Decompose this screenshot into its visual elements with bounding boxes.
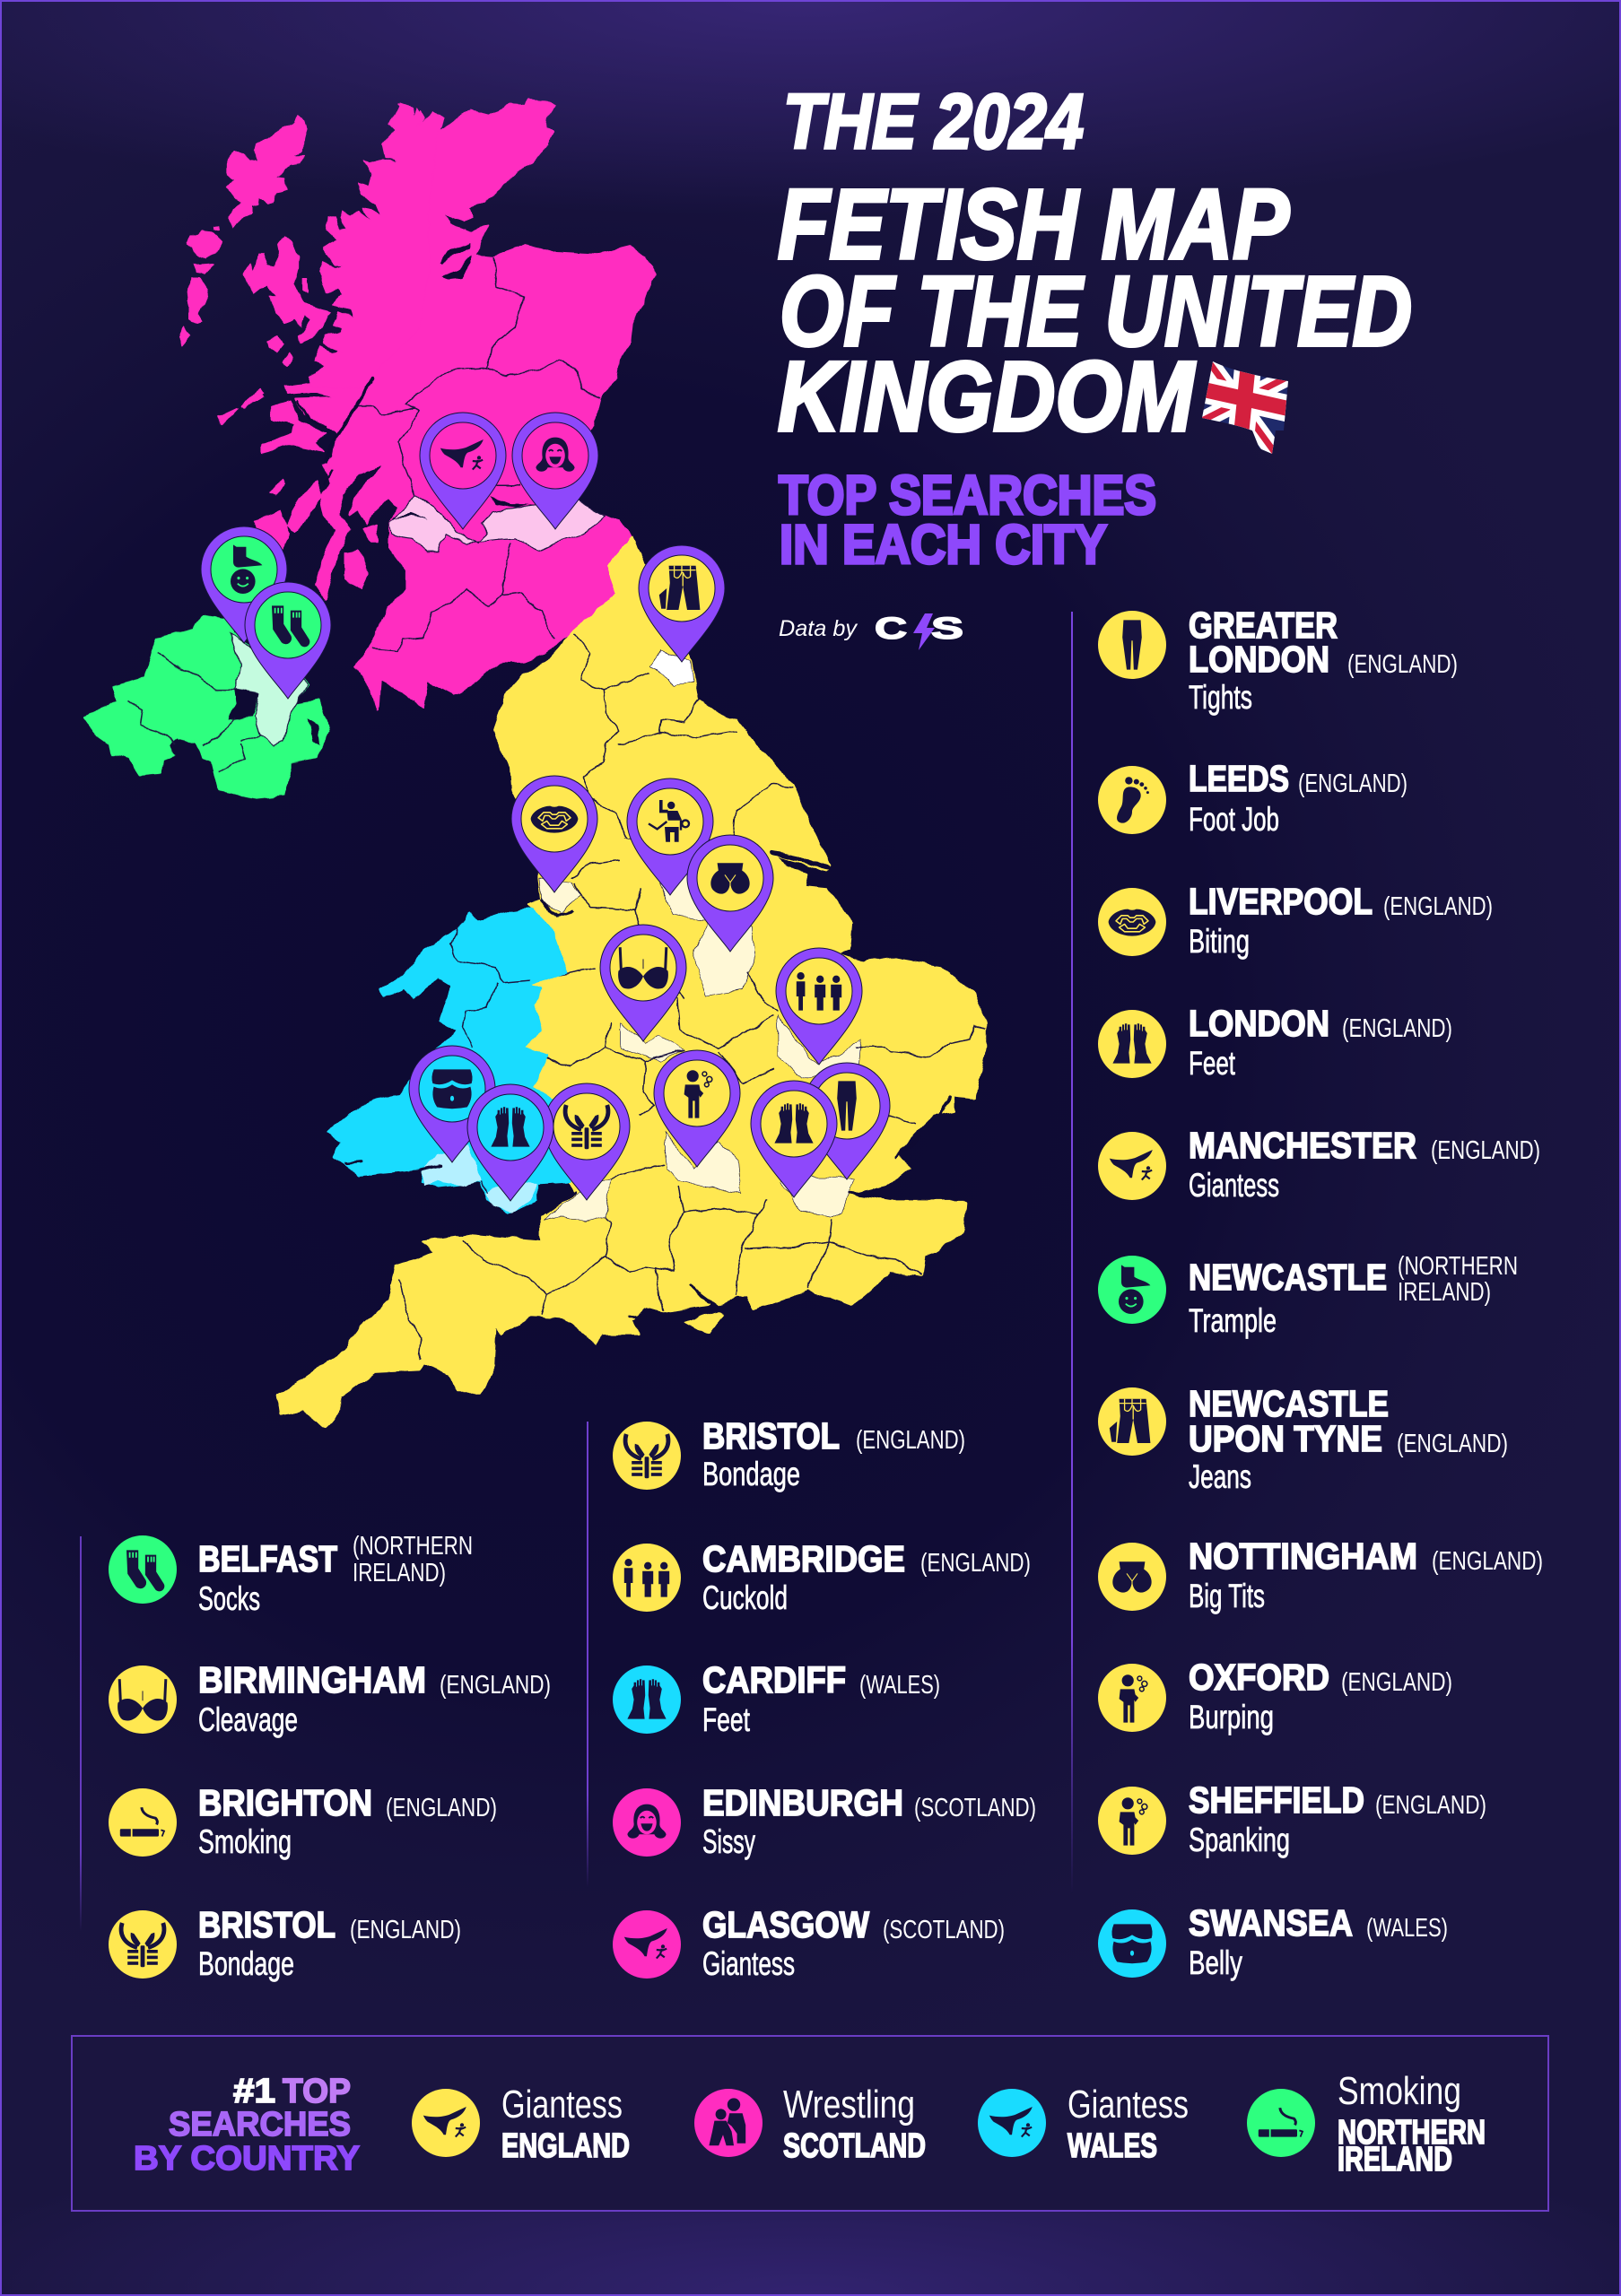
entry: Oxford: OXFORD bbox=[1189, 1657, 1329, 1698]
title: OF THE UNITED bbox=[780, 257, 1412, 367]
heading: #1 top searches by country: BY COUNTRY bbox=[134, 2140, 360, 2178]
map pin: Swansea (belly) bbox=[409, 1046, 495, 1162]
entry: Liverpool bbox=[1098, 881, 1493, 960]
heading: #1 top searches by country: SEARCHES bbox=[169, 2106, 351, 2144]
entry: Nottingham bbox=[1098, 1535, 1543, 1614]
entry: Belfast: Socks bbox=[198, 1580, 260, 1617]
map region: England bbox=[278, 538, 984, 1427]
data credit and logo: S bbox=[931, 612, 963, 646]
entry: Belfast bbox=[109, 1532, 473, 1617]
data credit and logo: C bbox=[875, 612, 907, 646]
entry: Swansea: Belly bbox=[1189, 1944, 1242, 1981]
entry: Cardiff: (WALES) bbox=[859, 1671, 940, 1700]
entry: Newcastle, Northern Ireland: Trample bbox=[1189, 1302, 1277, 1339]
entry: London: Feet bbox=[1189, 1045, 1235, 1082]
map pin: Nottingham (big tits) bbox=[687, 835, 773, 952]
map pin: Newcastle upon Tyne (jeans) bbox=[639, 545, 725, 662]
entry: Manchester: MANCHESTER bbox=[1189, 1125, 1416, 1166]
subtitle: TOP SEARCHES bbox=[779, 465, 1156, 526]
entry: London bbox=[1098, 1003, 1452, 1082]
entry: Oxford bbox=[1098, 1657, 1452, 1735]
entry: Glasgow: (SCOTLAND) bbox=[883, 1916, 1005, 1944]
entry: Manchester bbox=[1098, 1125, 1540, 1204]
entry: London: (ENGLAND) bbox=[1342, 1014, 1452, 1043]
entry: Greater London bbox=[1098, 604, 1458, 716]
entry: Birmingham: (ENGLAND) bbox=[440, 1671, 551, 1700]
entry: Nottingham: NOTTINGHAM bbox=[1189, 1535, 1417, 1577]
map of the United Kingdom bbox=[84, 100, 984, 1427]
column divider: right bbox=[1071, 612, 1073, 1894]
entry: Swansea bbox=[1098, 1902, 1448, 1981]
country: Wales: WALES bbox=[1068, 2127, 1157, 2165]
heading: #1 top searches by country bbox=[134, 2073, 360, 2178]
map pin: Cardiff (feet) bbox=[467, 1084, 553, 1201]
map pin: Edinburgh (sissy) bbox=[512, 413, 598, 529]
title bbox=[778, 79, 1412, 452]
column divider: middle bbox=[587, 1422, 588, 1888]
entry: Liverpool: (ENGLAND) bbox=[1383, 892, 1493, 921]
map pin: Greater London (tights) bbox=[804, 1063, 890, 1179]
entry: Newcastle upon Tyne: Jeans bbox=[1189, 1458, 1251, 1495]
entry: Newcastle upon Tyne: NEWCASTLE bbox=[1189, 1383, 1389, 1424]
title: THE 2024 bbox=[783, 79, 1084, 165]
country: England: Giantess bbox=[501, 2083, 623, 2126]
entry: Oxford: Burping bbox=[1189, 1699, 1274, 1735]
entry: Newcastle, Northern Ireland: (NORTHERN bbox=[1398, 1252, 1518, 1281]
entry: Swansea: SWANSEA bbox=[1189, 1902, 1353, 1944]
map pin: Birmingham (cleavage) bbox=[600, 925, 686, 1041]
country: England: ENGLAND bbox=[501, 2127, 630, 2165]
entry: Sheffield: Spanking bbox=[1189, 1822, 1290, 1858]
entry: London: LONDON bbox=[1189, 1003, 1329, 1044]
map detail: Highlands and Hebrides bbox=[179, 103, 471, 405]
heading: #1 top searches by country: #1 bbox=[233, 2073, 275, 2110]
icon: union jack flag bbox=[1202, 361, 1288, 454]
entry: Bristol: (ENGLAND) bbox=[856, 1426, 965, 1455]
entry: Cambridge: CAMBRIDGE bbox=[702, 1538, 905, 1579]
entry: Greater London: (ENGLAND) bbox=[1347, 650, 1458, 679]
map highlight: Swansea and Cardiff bbox=[421, 1146, 536, 1213]
entry: Cardiff: CARDIFF bbox=[702, 1659, 846, 1700]
map highlight: Belfast bbox=[230, 632, 309, 747]
entry: Brighton: (ENGLAND) bbox=[386, 1794, 497, 1822]
map region: Scotland bbox=[179, 100, 655, 710]
entry: Greater London: Tights bbox=[1189, 679, 1252, 716]
entry: Oxford: (ENGLAND) bbox=[1341, 1668, 1452, 1697]
entry: Birmingham bbox=[109, 1659, 551, 1738]
country: Northern Ireland bbox=[1247, 2069, 1486, 2179]
country: Scotland bbox=[694, 2083, 926, 2165]
entry: Leeds bbox=[1098, 758, 1407, 838]
country: Northern Ireland: Smoking bbox=[1338, 2069, 1461, 2113]
entry: Leeds: Foot Job bbox=[1189, 801, 1279, 838]
column divider: left bbox=[80, 1536, 82, 1931]
map pin: Sheffield (spanking) bbox=[627, 778, 713, 895]
entry: Bristol bbox=[613, 1415, 965, 1492]
entry: Leeds: LEEDS bbox=[1189, 758, 1289, 799]
entry: Newcastle, Northern Ireland: IRELAND) bbox=[1398, 1278, 1491, 1307]
entry: Nottingham: Big Tits bbox=[1189, 1578, 1265, 1614]
country: Northern Ireland: NORTHERN bbox=[1338, 2114, 1486, 2152]
list: middle column bbox=[613, 1415, 1036, 1982]
entry: Newcastle upon Tyne bbox=[1098, 1383, 1508, 1495]
entry: Birmingham: Cleavage bbox=[198, 1701, 298, 1738]
entry: Liverpool: Biting bbox=[1189, 923, 1250, 960]
map pin: Cambridge (cuckold) bbox=[776, 948, 862, 1065]
entry: Manchester: Giantess bbox=[1189, 1167, 1279, 1204]
entry: Bristol bbox=[109, 1904, 461, 1982]
entry: Cambridge: Cuckold bbox=[702, 1579, 788, 1616]
entry: Sheffield: SHEFFIELD bbox=[1189, 1779, 1364, 1821]
entry: Brighton: Smoking bbox=[198, 1823, 292, 1860]
entry: Brighton: BRIGHTON bbox=[198, 1782, 372, 1823]
subtitle bbox=[779, 465, 1156, 575]
title: FETISH MAP bbox=[778, 170, 1290, 280]
entry: Edinburgh: (SCOTLAND) bbox=[914, 1794, 1036, 1822]
entry: Cambridge bbox=[613, 1538, 1031, 1616]
map pin: Oxford (burping) bbox=[654, 1050, 740, 1167]
country: Scotland: SCOTLAND bbox=[783, 2127, 926, 2165]
country: England bbox=[412, 2083, 630, 2165]
entry: Newcastle upon Tyne: (ENGLAND) bbox=[1397, 1430, 1508, 1458]
map pin: Newcastle, Northern Ireland (trample) bbox=[201, 526, 287, 643]
entry: Belfast: BELFAST bbox=[198, 1538, 337, 1579]
entry: Manchester: (ENGLAND) bbox=[1431, 1136, 1540, 1165]
map pin: Bristol (bondage) bbox=[544, 1083, 630, 1200]
entry: Belfast: IRELAND) bbox=[353, 1559, 446, 1587]
entry: Newcastle upon Tyne: UPON TYNE bbox=[1189, 1418, 1382, 1459]
map highlight: Glasgow and Edinburgh bbox=[388, 495, 604, 552]
country: Wales: Giantess bbox=[1068, 2083, 1189, 2126]
subtitle: IN EACH CITY bbox=[780, 514, 1107, 575]
list: left column bbox=[109, 1532, 551, 1982]
entry: Cambridge: (ENGLAND) bbox=[920, 1549, 1031, 1578]
map region: Northern Ireland bbox=[84, 616, 327, 797]
entry: Bristol: BRISTOL bbox=[198, 1904, 336, 1945]
entry: Edinburgh: EDINBURGH bbox=[702, 1782, 903, 1823]
entry: Bristol: BRISTOL bbox=[702, 1415, 840, 1457]
entry: Greater London: LONDON bbox=[1189, 639, 1329, 680]
entry: Swansea: (WALES) bbox=[1366, 1914, 1448, 1943]
list: right column bbox=[1098, 604, 1543, 1981]
entry: Edinburgh: Sissy bbox=[702, 1823, 755, 1860]
data credit and logo: Data by bbox=[779, 616, 858, 641]
entry: Cardiff bbox=[613, 1659, 940, 1738]
country: Scotland: Wrestling bbox=[783, 2083, 915, 2126]
map pin: Glasgow (giantess) bbox=[420, 413, 506, 529]
entry: Sheffield bbox=[1098, 1779, 1486, 1858]
entry: Birmingham: BIRMINGHAM bbox=[198, 1659, 426, 1700]
entry: Sheffield: (ENGLAND) bbox=[1375, 1791, 1486, 1820]
entry: Glasgow: Giantess bbox=[702, 1945, 795, 1982]
entry: Bristol: Bondage bbox=[198, 1945, 294, 1982]
title: KINGDOM bbox=[778, 342, 1196, 452]
entry: Cardiff: Feet bbox=[702, 1701, 751, 1738]
map pin: Belfast (socks) bbox=[245, 582, 331, 699]
entry: Newcastle, Northern Ireland bbox=[1098, 1252, 1518, 1339]
entry: Greater London: GREATER bbox=[1189, 604, 1338, 646]
entry: Newcastle, Northern Ireland: NEWCASTLE bbox=[1189, 1257, 1387, 1298]
country: Wales bbox=[978, 2083, 1189, 2165]
country: Northern Ireland: IRELAND bbox=[1338, 2141, 1452, 2179]
entry: Liverpool: LIVERPOOL bbox=[1189, 881, 1373, 922]
entry: Nottingham: (ENGLAND) bbox=[1432, 1547, 1543, 1576]
entry: Leeds: (ENGLAND) bbox=[1298, 770, 1407, 798]
entry: Belfast: (NORTHERN bbox=[353, 1532, 473, 1561]
entry: Brighton bbox=[109, 1782, 497, 1860]
heading: #1 top searches by country: TOP bbox=[283, 2073, 351, 2110]
panel: top searches by country bbox=[72, 2036, 1548, 2211]
entry: Bristol: (ENGLAND) bbox=[350, 1916, 461, 1944]
data credit and logo bbox=[779, 612, 963, 650]
map pin: London (feet) bbox=[751, 1081, 837, 1197]
map highlights: English cities bbox=[539, 650, 861, 1222]
map region: Wales bbox=[327, 909, 571, 1213]
entry: Edinburgh bbox=[613, 1782, 1036, 1860]
entry: Bristol: Bondage bbox=[702, 1456, 800, 1492]
map pin: Liverpool (biting) bbox=[511, 776, 597, 892]
entry: Glasgow: GLASGOW bbox=[702, 1904, 869, 1945]
entry: Glasgow bbox=[613, 1904, 1005, 1982]
